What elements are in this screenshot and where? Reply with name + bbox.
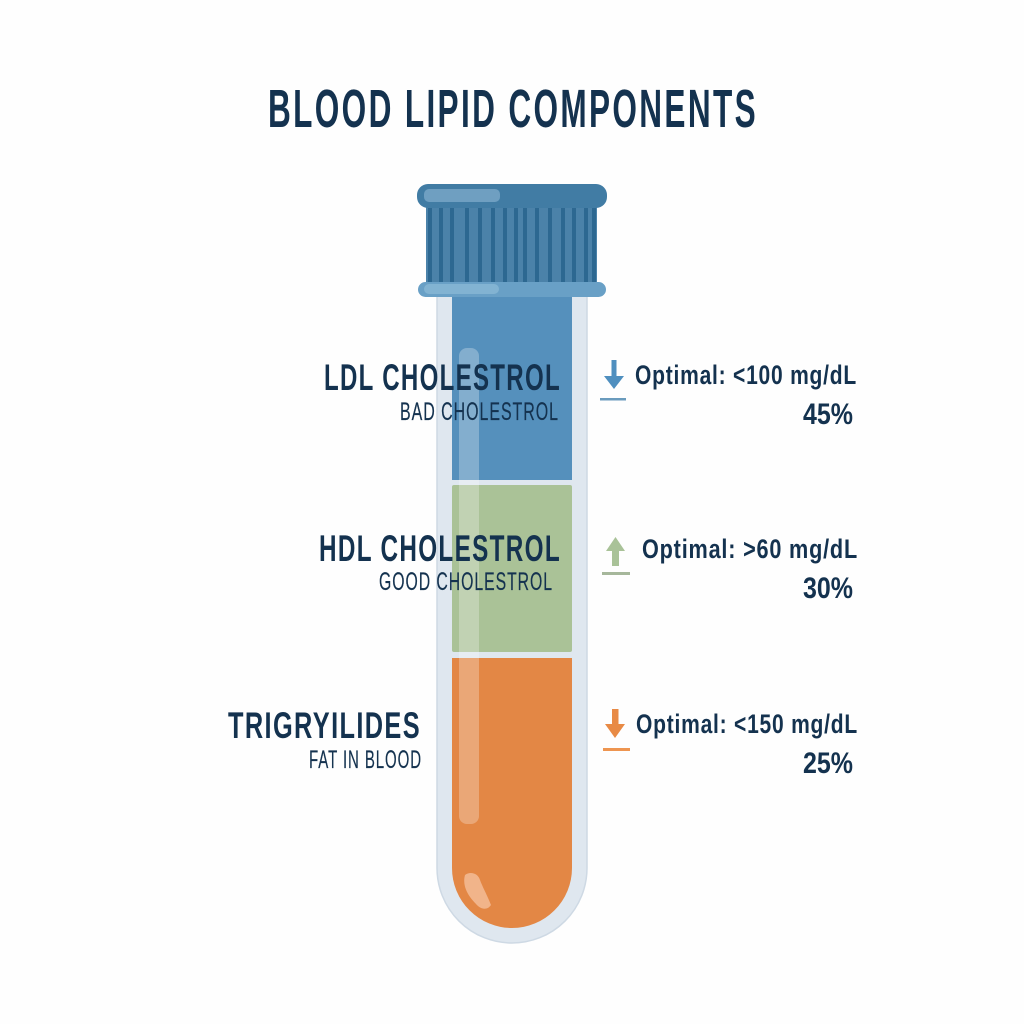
LDL percentage: 45%: [803, 398, 853, 431]
cap grip body: [426, 206, 597, 284]
label: triglycerides: [228, 705, 422, 774]
triglycerides optimal range: Optimal: <150 mg/dL: [636, 709, 858, 739]
HDL description: GOOD CHOLESTROL: [379, 568, 553, 596]
label: LDL cholesterol: [324, 357, 561, 426]
test tube: [437, 290, 587, 943]
LDL optimal range: Optimal: <100 mg/dL: [635, 360, 857, 390]
cap top rim: [417, 184, 607, 208]
triglycerides percentage: 25%: [803, 747, 853, 780]
icon: orange down arrow: [603, 709, 630, 751]
tube glass wall: [437, 290, 587, 943]
icon: green up arrow: [602, 537, 630, 575]
cap bottom ring: [418, 282, 606, 297]
triglycerides name: TRIGRYILIDES: [228, 705, 421, 746]
label: HDL cholesterol: [319, 528, 561, 596]
cap grip ribs: [430, 208, 594, 282]
HDL percentage: 30%: [803, 572, 853, 605]
HDL optimal range: Optimal: >60 mg/dL: [642, 534, 858, 564]
LDL description: BAD CHOLESTROL: [400, 398, 559, 426]
layer: LDL blue: [452, 296, 572, 480]
bottom gloss highlight: [464, 873, 491, 909]
triglycerides description: FAT IN BLOOD: [309, 746, 422, 774]
icon: blue down arrow: [600, 360, 626, 400]
layer: HDL green: [452, 485, 572, 652]
LDL name: LDL CHOLESTROL: [324, 357, 561, 398]
cap ring shine: [424, 284, 499, 294]
HDL name: HDL CHOLESTROL: [319, 528, 561, 569]
layer: triglycerides orange: [452, 658, 572, 928]
tube gloss highlight: [459, 348, 479, 824]
tube cap: [417, 184, 607, 297]
cap top shine: [424, 189, 500, 202]
